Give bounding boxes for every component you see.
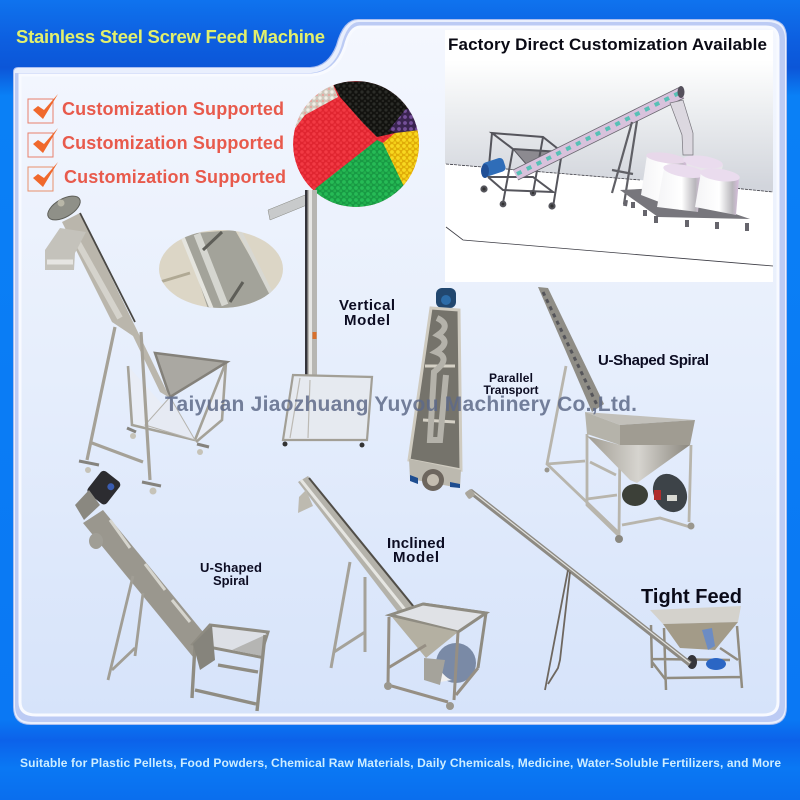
hopper frame back <box>423 604 486 668</box>
machine: tight feed <box>464 488 742 690</box>
end plate <box>409 459 461 488</box>
flange <box>44 191 84 225</box>
label: tight feed: Tight Feed <box>641 586 742 608</box>
check item 3 <box>28 162 286 191</box>
hopper cart <box>481 133 562 209</box>
label: u-shaped spiral left: Spiral <box>213 573 249 588</box>
hopper <box>650 606 741 624</box>
motor <box>706 658 726 670</box>
floor lines <box>446 164 773 266</box>
pellet circle <box>293 81 419 207</box>
machine: vertical model <box>268 190 372 448</box>
hopper frame <box>193 625 268 657</box>
long tube <box>470 491 690 664</box>
label: vertical model: Model <box>344 312 390 329</box>
tube <box>298 476 420 620</box>
motor <box>86 469 122 506</box>
machine: inclined model <box>298 476 486 710</box>
machine: u-shaped spiral with hopper <box>538 287 695 543</box>
silos <box>641 150 741 215</box>
outlet <box>45 228 86 270</box>
machine: u-shaped spiral left <box>75 469 268 711</box>
check item 2 <box>28 128 284 157</box>
inclined screw tube <box>513 86 684 180</box>
hopper tray <box>283 375 372 440</box>
label: u-shaped spiral left: U-Shaped <box>200 560 262 575</box>
machine: parallel transport trough <box>409 288 461 491</box>
label: inclined model: Inclined <box>387 535 445 552</box>
label: vertical model: Vertical <box>339 297 395 314</box>
supports <box>108 576 143 680</box>
label: inclined model <box>387 535 445 566</box>
footer caption: Suitable for Plastic Pellets, Food Powders, Chemical Raw Materials, Daily Chemicals, Medicine, Water-Soluble Fertilizers, and More <box>20 756 781 770</box>
motor <box>481 157 507 178</box>
machine: inclined auger with hopper <box>44 191 227 495</box>
legs <box>547 366 691 536</box>
casters <box>615 535 623 543</box>
hopper <box>390 604 486 632</box>
label: u-shaped spiral left <box>200 560 262 588</box>
label: u-shaped spiral right: U-Shaped Spiral <box>598 352 709 369</box>
discharge pipe <box>670 100 693 155</box>
trough <box>83 510 203 657</box>
hopper frame <box>128 362 226 442</box>
check item 1 <box>28 94 284 123</box>
check item 2: Customization Supported <box>62 133 284 153</box>
check item 1: Customization Supported <box>62 99 284 119</box>
label: parallel transport: Transport <box>484 383 538 397</box>
frame <box>651 625 742 690</box>
title: Stainless Steel Screw Feed Machine <box>16 26 325 47</box>
gear and motor <box>622 484 648 506</box>
column <box>305 190 317 375</box>
casters <box>79 428 209 486</box>
checklist: customization supported <box>28 94 286 191</box>
hopper cone <box>587 436 690 483</box>
tube supports <box>545 570 570 690</box>
arm <box>268 195 307 220</box>
hopper top <box>585 412 695 425</box>
motor <box>436 288 456 308</box>
auger tube <box>62 213 170 398</box>
check item 3: Customization Supported <box>64 167 286 187</box>
trough <box>409 308 461 470</box>
panel: factory CAD illustration <box>445 30 773 282</box>
platform <box>620 188 750 231</box>
legs <box>331 562 365 668</box>
legs <box>87 327 150 480</box>
label: vertical model <box>339 297 395 329</box>
detail oval: screw inside trough <box>159 230 283 315</box>
label: inclined model: Model <box>393 549 439 566</box>
label: parallel transport <box>484 371 538 397</box>
label: parallel transport: Parallel <box>489 371 533 385</box>
watermark: Taiyuan Jiaozhuang Yuyou Machinery Co.,Ltd. <box>165 393 637 416</box>
tube support legs <box>612 121 637 204</box>
motor <box>436 643 476 683</box>
trough <box>538 287 604 412</box>
heading: factory customization: Factory Direct Customization Available <box>448 35 767 54</box>
